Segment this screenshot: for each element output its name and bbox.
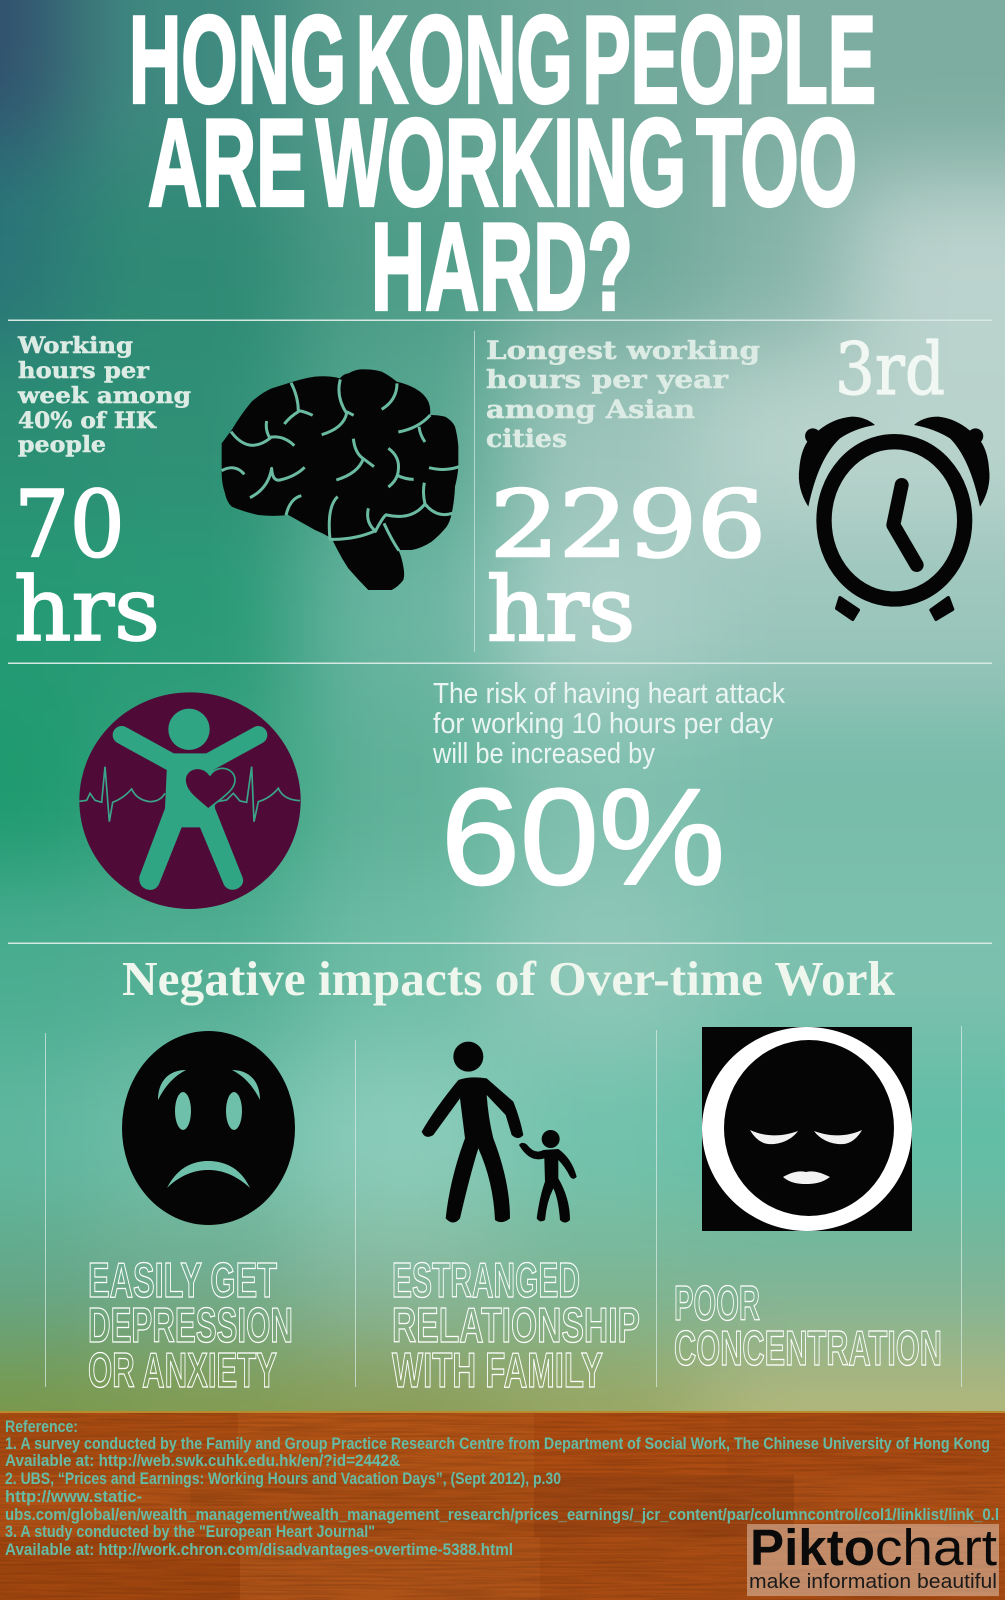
panel: weekly working hours (14, 333, 459, 661)
references text: 3. A study conducted by the "European Heart Journal" (5, 1522, 375, 1541)
references text (5, 1417, 999, 1559)
label: estranged: WITH FAMILY (392, 1344, 603, 1398)
60% figure: 60% (441, 761, 725, 914)
panel: wood footer (0, 1411, 1005, 1600)
panel: depression or anxiety (88, 1031, 295, 1398)
yearly hours description: among Asian (486, 395, 695, 424)
label: depression: OR ANXIETY (88, 1344, 277, 1398)
panel: poor concentration (674, 1027, 942, 1376)
icon: brain (222, 369, 459, 590)
weekly hours description: Working (17, 333, 133, 359)
panel: yearly working hours (486, 327, 989, 661)
icon: tired face (702, 1027, 912, 1231)
icon: alarm clock (799, 417, 989, 619)
2296 hrs figure (487, 471, 766, 661)
icon: father and child (422, 1042, 577, 1222)
logo: Piktochart: make information beautiful (749, 1571, 997, 1593)
icon: person with heart (79, 692, 301, 909)
label: estranged: RELATIONSHIP (392, 1299, 640, 1353)
yearly hours description: hours per year (486, 365, 729, 394)
yearly hours description: cities (486, 424, 567, 453)
title: HARD? (371, 198, 633, 336)
references text: Reference: (5, 1417, 78, 1436)
2296 hrs figure: hrs (487, 558, 635, 661)
icon: sad face (122, 1031, 295, 1225)
label: estranged (392, 1254, 640, 1398)
label: depression: DEPRESSION (88, 1299, 293, 1353)
logo: Piktochart (747, 1519, 999, 1596)
section dividers (8, 320, 992, 944)
yearly hours description (486, 336, 760, 453)
70 hrs figure: 70 (14, 471, 125, 578)
label: depression: EASILY GET (88, 1254, 277, 1308)
label: depression (88, 1254, 293, 1398)
70 hrs figure: hrs (14, 558, 160, 661)
weekly hours description: people (18, 432, 106, 458)
weekly hours description: 40% of HK (18, 408, 157, 434)
title (129, 0, 876, 336)
label: poor concentration: POOR (674, 1277, 760, 1331)
risk description (432, 678, 785, 770)
weekly hours description: hours per (18, 358, 149, 384)
references text: 2. UBS, “Prices and Earnings: Working Hours and Vacation Days”, (Sept 2012), p.30 (5, 1469, 561, 1488)
2296 hrs figure: 2296 (490, 471, 766, 578)
yearly hours description: Longest working (486, 336, 760, 365)
weekly hours description (17, 333, 191, 458)
logo: Piktochart: Pikto (750, 1519, 875, 1576)
label: poor concentration (674, 1277, 942, 1376)
risk description: The risk of having heart attack (433, 678, 785, 710)
risk description: for working 10 hours per day (433, 708, 773, 740)
70 hrs figure (14, 471, 160, 661)
logo: Piktochart: chart (875, 1519, 997, 1576)
risk description: will be increased by (432, 738, 655, 770)
weekly hours description: week among (17, 383, 191, 409)
panel: estranged relationship (392, 1042, 640, 1398)
references text: http://www.static- (5, 1487, 142, 1506)
heading: negative impacts: Negative impacts of Over-time Work (122, 951, 896, 1006)
references text: Available at: http://work.chron.com/disadvantages-overtime-5388.html (5, 1540, 513, 1559)
references text: Available at: http://web.swk.cuhk.edu.hk/en/?id=2442& (5, 1451, 400, 1470)
label: estranged: ESTRANGED (392, 1254, 580, 1308)
column dividers (45, 1026, 962, 1387)
3rd ranking: 3rd (835, 327, 945, 411)
panel: heart attack risk (79, 678, 785, 914)
